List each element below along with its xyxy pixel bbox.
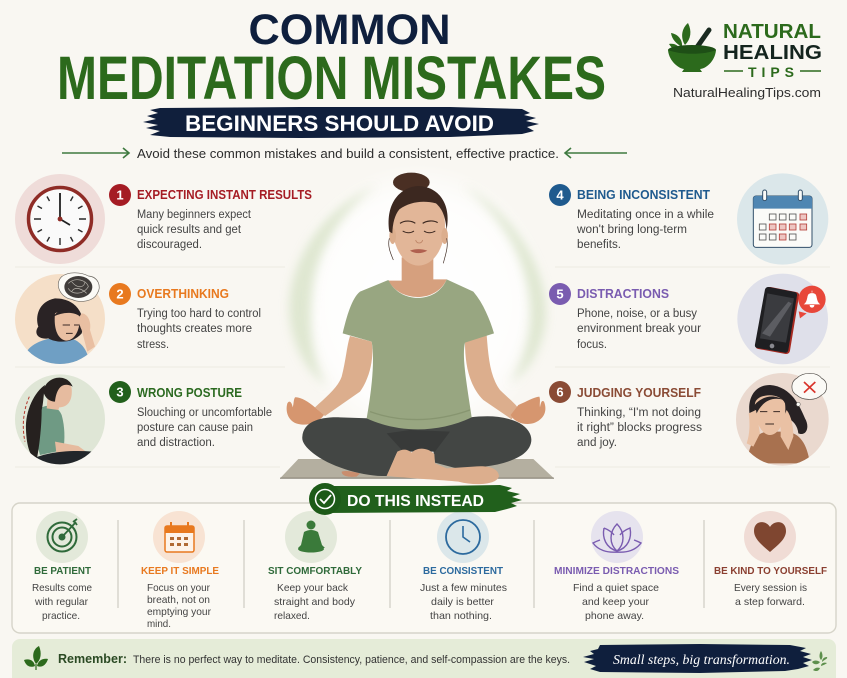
badge — [109, 283, 131, 305]
arms — [315, 336, 372, 416]
remember bar — [12, 639, 836, 678]
description: discouraged. — [137, 239, 202, 251]
description: mind. — [147, 618, 171, 630]
description: Trying too hard to control — [137, 308, 261, 320]
tip: minimize distractions — [554, 511, 679, 622]
front shin and foot — [387, 449, 499, 484]
badge — [549, 381, 571, 403]
title: COMMON — [248, 6, 450, 54]
title: MEDITATION MISTAKES — [57, 44, 606, 112]
row separators — [15, 267, 830, 467]
description: practice. — [42, 610, 80, 622]
icon: leaf sprig — [24, 646, 48, 670]
mistake 3: WRONG POSTURE — [137, 386, 242, 400]
description: and keep your — [582, 596, 649, 608]
central figure: meditating woman — [280, 163, 554, 484]
badge — [109, 381, 131, 403]
description: Slouching or uncomfortable — [137, 407, 272, 419]
tip: be consistent: BE CONSISTENT — [423, 566, 503, 577]
description: emptying your — [147, 606, 211, 618]
badge: 6 — [556, 384, 564, 400]
icon: heart — [744, 511, 796, 563]
mistake 4: BEING INCONSISTENT — [577, 188, 710, 202]
description: Just a few minutes — [420, 582, 507, 594]
mistake 5 — [549, 274, 828, 364]
mistake 2: OVERTHINKING — [137, 287, 229, 301]
icon: worried woman — [736, 373, 829, 466]
description: Meditating once in a while — [577, 209, 714, 221]
mistake 6: JUDGING YOURSELF — [577, 386, 701, 400]
description: Focus on your — [147, 582, 210, 594]
badge: 1 — [116, 188, 124, 202]
hair — [389, 186, 448, 233]
description: a step forward. — [735, 596, 805, 608]
description: environment break your — [577, 323, 701, 335]
tip: sit comfortably — [268, 511, 362, 622]
icon: small sprig — [812, 651, 827, 671]
description: daily is better — [431, 596, 494, 608]
description: and joy. — [577, 437, 617, 449]
badge — [549, 184, 571, 206]
remember bar: There is no perfect way to meditate. Consistency, patience, and self-compassion are the keys. — [133, 654, 570, 666]
description — [573, 582, 659, 622]
description — [32, 582, 92, 622]
description — [147, 582, 211, 630]
description: focus. — [577, 339, 607, 351]
mat — [280, 459, 554, 478]
subtitle brush banner — [143, 107, 539, 138]
description — [734, 582, 807, 608]
description — [577, 407, 702, 449]
icon: phone with bell — [737, 274, 828, 364]
description: Results come — [32, 582, 92, 594]
badge: 3 — [116, 384, 124, 400]
badge: 4 — [556, 188, 564, 202]
description: Every session is — [734, 582, 807, 594]
halo — [289, 185, 546, 387]
description: breath, not on — [147, 594, 210, 606]
tip: be consistent — [420, 511, 507, 622]
description: thoughts creates more — [137, 323, 252, 335]
face details — [400, 221, 438, 223]
logo: NATURAL — [723, 21, 821, 43]
hands — [287, 397, 324, 425]
description: it right” blocks progress — [577, 422, 702, 434]
brush callout: Small steps, big transformation. — [613, 653, 790, 668]
subtitle brush banner: BEGINNERS SHOULD AVOID — [185, 111, 494, 136]
description: won't bring long-term — [576, 224, 687, 236]
tip: sit comfortably: SIT COMFORTABLY — [268, 566, 362, 577]
mistake 3 — [15, 374, 272, 470]
description: Many beginners expect — [137, 209, 252, 221]
description — [576, 209, 714, 251]
badge — [549, 283, 571, 305]
intro line with arrows: Avoid these common mistakes and build a consistent, effective practice. — [137, 146, 559, 161]
tip: minimize distractions: MINIMIZE DISTRACTIONS — [554, 566, 679, 577]
icon: clock — [15, 174, 105, 264]
description: posture can cause pain — [137, 422, 253, 434]
head — [392, 198, 445, 266]
tip: be patient — [32, 511, 92, 622]
mistake 4 — [549, 173, 828, 265]
heading: do this instead — [309, 483, 522, 515]
description: relaxed. — [274, 610, 310, 622]
mistake 2 — [15, 273, 261, 367]
tip: be patient: BE PATIENT — [34, 566, 91, 577]
back foot — [342, 471, 360, 477]
icon: blue clock — [437, 511, 489, 563]
panel: do this instead — [12, 503, 836, 633]
description — [420, 582, 507, 622]
description: benefits. — [577, 239, 621, 251]
legs — [302, 416, 531, 476]
logo: NaturalHealingTips.com — [673, 85, 821, 100]
description — [137, 407, 272, 449]
logo — [668, 21, 822, 100]
icon: calendar — [737, 173, 828, 265]
description: straight and body — [274, 596, 356, 608]
mistake 1 — [15, 174, 312, 264]
badge: 2 — [116, 286, 124, 302]
description: than nothing. — [430, 610, 492, 622]
icon: mortar and leaves — [668, 23, 716, 72]
description — [274, 582, 356, 622]
thought bubble — [58, 273, 99, 301]
description: Phone, noise, or a busy — [577, 308, 697, 320]
icon: target — [36, 511, 88, 563]
description: and distraction. — [137, 437, 215, 449]
logo: TIPS — [748, 64, 794, 80]
description: Keep your back — [277, 582, 349, 594]
heading: do this instead: DO THIS INSTEAD — [347, 493, 484, 510]
icon: lotus — [591, 511, 643, 563]
description: Find a quiet space — [573, 582, 659, 594]
tip: be kind to yourself — [714, 511, 827, 608]
icon: seated figure — [285, 511, 337, 563]
icon: slouching woman — [15, 374, 105, 470]
mistake 6 — [549, 373, 829, 466]
tip: keep it simple: KEEP IT SIMPLE — [141, 566, 219, 577]
description — [577, 308, 701, 351]
shirt — [343, 279, 494, 429]
description: Thinking, “I'm not doing — [577, 407, 701, 419]
remember bar: Remember: — [58, 651, 127, 666]
description: quick results and get — [137, 224, 242, 236]
logo: HEALING — [723, 42, 822, 64]
hair bun — [393, 173, 430, 192]
title — [57, 6, 606, 112]
icon: orange calendar — [153, 511, 205, 563]
description: stress. — [137, 339, 169, 351]
description: with regular — [34, 596, 88, 608]
description — [137, 209, 252, 251]
badge: 5 — [556, 286, 564, 302]
neck — [388, 257, 447, 297]
badge — [109, 184, 131, 206]
tip: be kind to yourself: BE KIND TO YOURSELF — [714, 566, 827, 577]
icon: overthinking woman — [15, 273, 105, 367]
mistake 1: EXPECTING INSTANT RESULTS — [137, 188, 312, 202]
description: phone away. — [585, 610, 644, 622]
brush callout — [583, 644, 812, 673]
tip: keep it simple — [141, 511, 219, 630]
mistake 5: DISTRACTIONS — [577, 287, 669, 301]
description — [137, 308, 261, 351]
thought bubble — [792, 373, 827, 406]
